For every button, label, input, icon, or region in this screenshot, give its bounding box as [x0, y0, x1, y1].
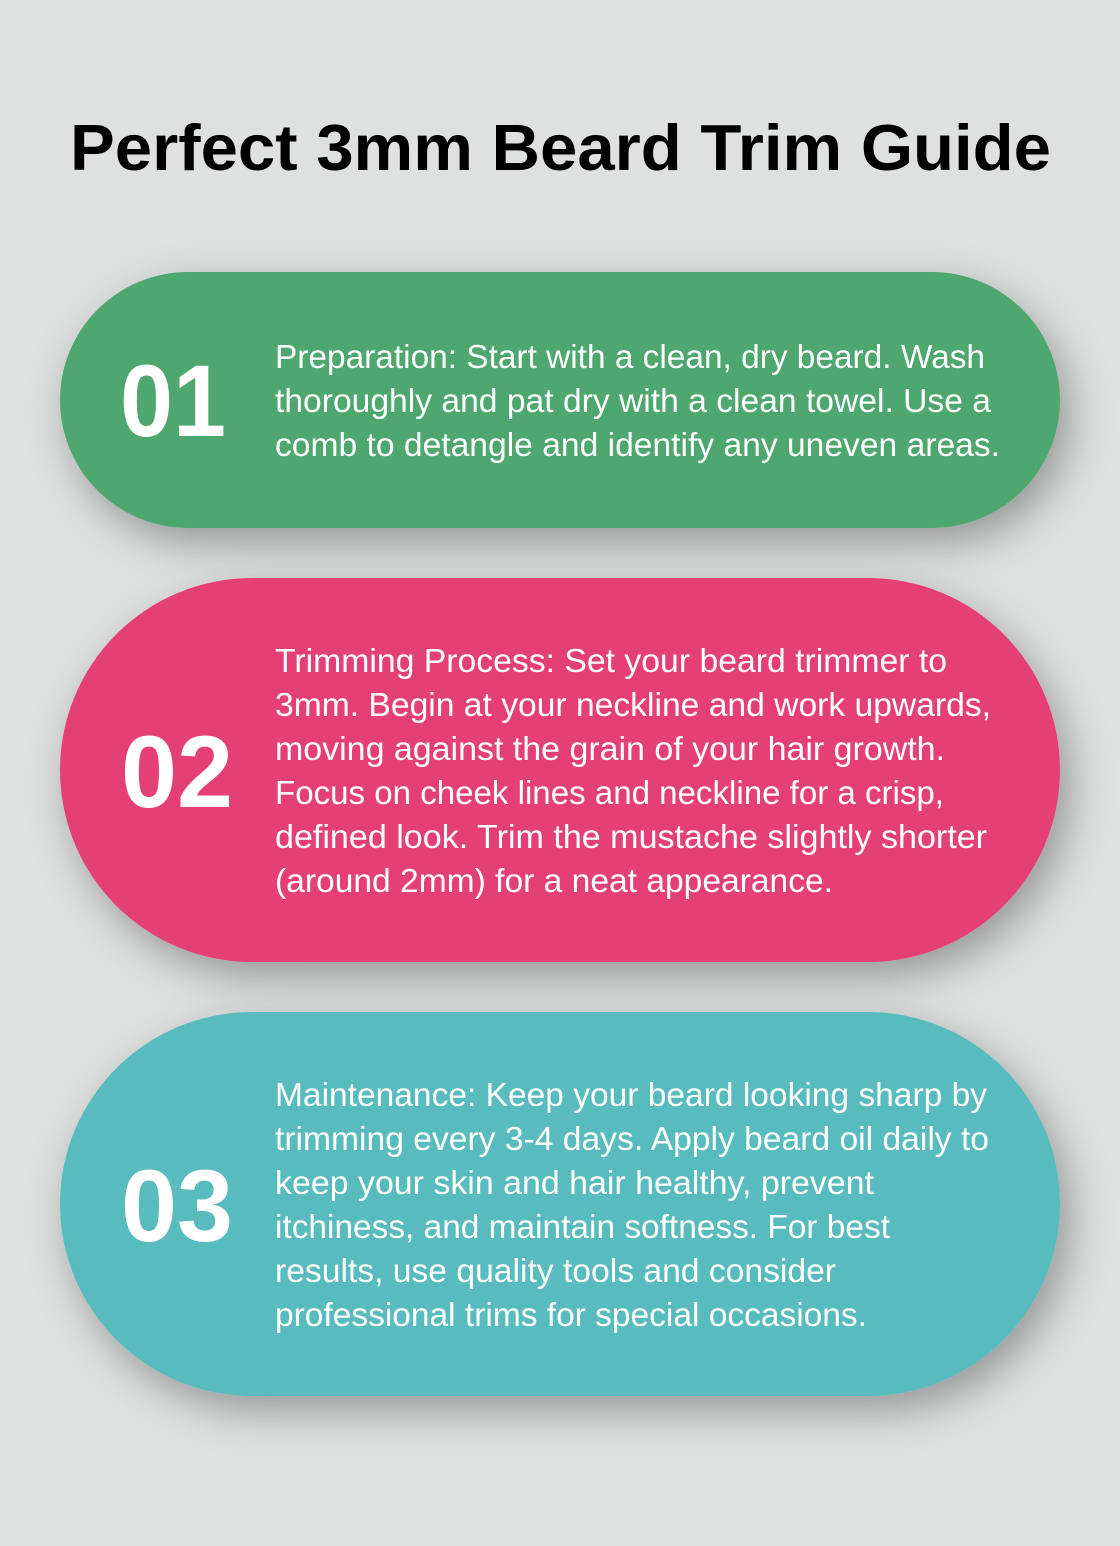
text block: step 02: Trimming Process: Set your beard trimmer to	[275, 642, 947, 679]
panel: step 01 preparation	[60, 272, 1060, 528]
text block: step 02	[275, 642, 991, 899]
pill background: step 03	[60, 1012, 1060, 1396]
text block: step 03: results, use quality tools and consider	[275, 1252, 836, 1289]
text block: step 01: Preparation: Start with a clean, dry beard. Wash	[275, 338, 985, 375]
number: 03: 03	[121, 1149, 233, 1263]
text block: step 01	[275, 338, 1000, 463]
text block: step 03: keep your skin and hair healthy, prevent	[275, 1164, 874, 1201]
title: Perfect 3mm Beard Trim Guide	[70, 111, 1051, 184]
text block: step 02: moving against the grain of your hair growth.	[275, 730, 945, 767]
text block: step 02: defined look. Trim the mustache slightly shorter	[275, 818, 987, 855]
panel: step 02 trimming process	[60, 578, 1060, 962]
text block: step 03: Maintenance: Keep your beard looking sharp by	[275, 1076, 987, 1113]
text block: step 03: itchiness, and maintain softness. For best	[275, 1208, 890, 1245]
text block: step 02: Focus on cheek lines and neckline for a crisp,	[275, 774, 944, 811]
text block: step 01: thoroughly and pat dry with a clean towel. Use a	[275, 382, 992, 419]
text block: step 01: comb to detangle and identify any uneven areas.	[275, 426, 1000, 463]
text block: step 03	[275, 1076, 989, 1333]
text block: step 02: 3mm. Begin at your neckline and work upwards,	[275, 686, 991, 723]
text block: step 02: (around 2mm) for a neat appearance.	[275, 862, 833, 899]
text block: step 03: trimming every 3-4 days. Apply beard oil daily to	[275, 1120, 989, 1157]
text block: step 03: professional trims for special occasions.	[275, 1296, 867, 1333]
number: 02: 02	[121, 715, 233, 829]
number: 01: 01	[120, 344, 226, 458]
pill background: step 02	[60, 578, 1060, 962]
pill background: step 01	[60, 272, 1060, 528]
panel: step 03 maintenance	[60, 1012, 1060, 1396]
